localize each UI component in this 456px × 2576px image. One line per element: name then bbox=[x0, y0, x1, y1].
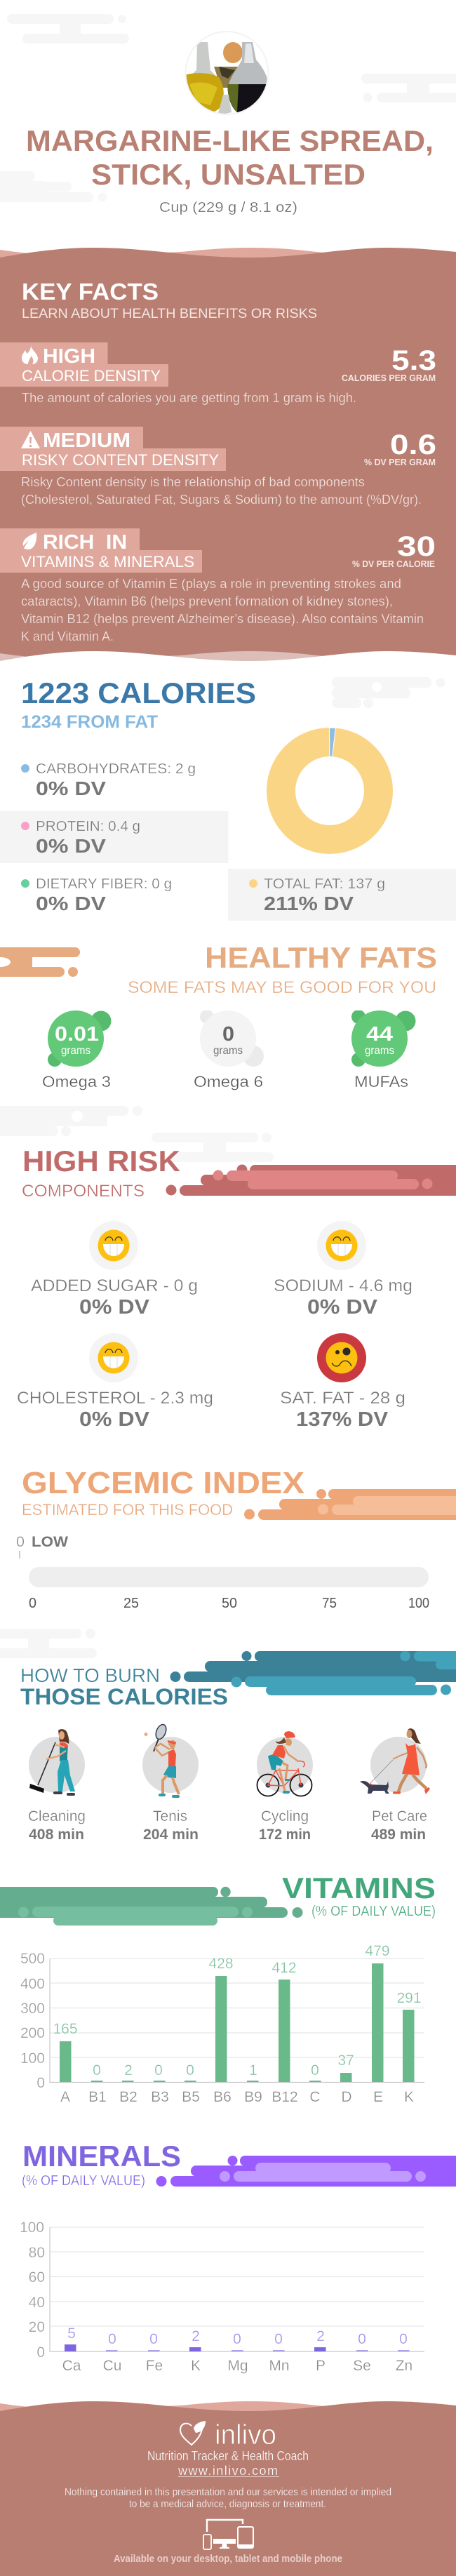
bar chart: vitamins: A bbox=[60, 2089, 70, 2105]
bar chart: vitamins: B5 bbox=[182, 2089, 200, 2105]
bar chart: minerals: 2 bbox=[316, 2328, 325, 2344]
bar chart: minerals: 0 bbox=[274, 2331, 283, 2347]
disclaimer bbox=[65, 2486, 391, 2510]
healthy fats heading: HEALTHY FATS bbox=[205, 941, 437, 974]
fact: risky content density: 0.6 bbox=[390, 429, 436, 460]
panel: how to burn those calories bbox=[20, 1651, 456, 1843]
bar chart: vitamins: 400 bbox=[20, 1976, 45, 1992]
icon: leaf bbox=[23, 533, 36, 549]
fact: rich in vitamins and minerals: A good source of Vitamin E (plays a role in preventing strokes and bbox=[21, 577, 401, 591]
macro: carbohydrates bbox=[21, 761, 196, 799]
banner: burn bbox=[170, 1651, 456, 1695]
fact: calorie density: HIGH bbox=[43, 345, 95, 368]
website link: www.inlivo.com bbox=[177, 2464, 278, 2478]
fact: calorie density: The amount of calories you are getting from 1 gram is high. bbox=[22, 391, 356, 405]
minerals subheading: (% OF DAILY VALUE) bbox=[22, 2173, 145, 2189]
banner: glycemic index bbox=[244, 1489, 456, 1520]
bar chart: vitamins: 37 bbox=[337, 2053, 354, 2069]
food image: oil bottles bbox=[185, 31, 269, 116]
vitamins subheading: (% OF DAILY VALUE) bbox=[311, 1904, 436, 1919]
bar chart: minerals: P bbox=[316, 2358, 326, 2374]
bar chart: vitamins: 0 bbox=[154, 2062, 163, 2078]
disclaimer: to be a medical advice, diagnosis or treatment. bbox=[129, 2498, 326, 2510]
macro: protein: 0% DV bbox=[36, 835, 106, 857]
bar chart: minerals: 2 bbox=[192, 2328, 200, 2344]
bar chart: vitamins: 0 bbox=[36, 2075, 45, 2091]
icon: devices bbox=[203, 2520, 253, 2549]
icon: cyclist bbox=[257, 1731, 311, 1796]
high risk heading: HIGH RISK bbox=[22, 1144, 180, 1177]
fact: rich in vitamins and minerals: RICH IN bbox=[43, 531, 127, 554]
fat: omega 6 bbox=[194, 1010, 264, 1090]
glycemic index subheading: ESTIMATED FOR THIS FOOD bbox=[22, 1501, 233, 1519]
healthy fats subheading: SOME FATS MAY BE GOOD FOR YOU bbox=[128, 978, 436, 997]
panel: high risk components bbox=[17, 1144, 456, 1431]
bar chart: minerals: 80 bbox=[29, 2245, 45, 2261]
fat: omega 6: Omega 6 bbox=[194, 1073, 263, 1090]
macro: total fat: TOTAL FAT: 137 g bbox=[264, 876, 385, 892]
icon: smiling face bbox=[317, 1221, 366, 1270]
fact: calorie density: 5.3 bbox=[391, 345, 436, 376]
bar chart: minerals: Mn bbox=[269, 2358, 290, 2374]
fact: risky content density: % DV PER GRAM bbox=[364, 457, 436, 467]
key facts heading: KEY FACTS bbox=[22, 279, 159, 305]
wave top edge bbox=[0, 248, 456, 267]
bar chart: vitamins: 479 bbox=[365, 1943, 390, 1959]
fact: calorie density: CALORIE DENSITY bbox=[22, 367, 161, 385]
risk: saturated fat: 137% DV bbox=[296, 1408, 389, 1431]
risk: added sugar bbox=[31, 1221, 198, 1319]
glycemic scale bar bbox=[29, 1567, 429, 1587]
bar chart: vitamins: 200 bbox=[20, 2025, 45, 2041]
bar chart: minerals: 0 bbox=[358, 2331, 366, 2347]
macro: dietary fiber: DIETARY FIBER: 0 g bbox=[36, 876, 172, 892]
bar chart: vitamins: 2 bbox=[124, 2062, 133, 2078]
fact: risky content density: MEDIUM bbox=[43, 429, 130, 452]
bar chart: vitamins: B1 bbox=[88, 2089, 107, 2105]
fact: rich in vitamins and minerals: 30 bbox=[397, 531, 436, 562]
panel: key facts bbox=[0, 248, 456, 674]
panel: footer bbox=[0, 2401, 456, 2576]
bar chart: minerals: 0 bbox=[399, 2331, 408, 2347]
title: STICK, UNSALTED bbox=[91, 158, 366, 191]
banner: healthy fats bbox=[0, 947, 80, 977]
risk: added sugar: ADDED SUGAR - 0 g bbox=[31, 1276, 198, 1295]
fat: MUFAs: grams bbox=[365, 1045, 394, 1057]
vitamins heading: VITAMINS bbox=[282, 1871, 436, 1904]
minerals heading: MINERALS bbox=[22, 2140, 181, 2173]
fact: risky content density: Risky Content density is the relationship of bad components bbox=[21, 475, 365, 489]
activity: cycling bbox=[257, 1731, 313, 1843]
bar chart: minerals: 5 bbox=[67, 2325, 76, 2342]
fact: calorie density: CALORIES PER GRAM bbox=[342, 373, 436, 383]
banner: vitamins bbox=[0, 1887, 303, 1926]
fact: rich in vitamins and minerals: VITAMINS & MINERALS bbox=[21, 553, 194, 570]
title bbox=[26, 124, 434, 191]
bar chart: vitamins: B2 bbox=[119, 2089, 138, 2105]
risk: saturated fat bbox=[280, 1333, 405, 1431]
glycemic value marker: LOW bbox=[32, 1534, 68, 1550]
macro: carbohydrates: 0% DV bbox=[36, 778, 106, 799]
activity: cleaning bbox=[28, 1729, 86, 1843]
bar chart: vitamins: B9 bbox=[244, 2089, 262, 2105]
glycemic value marker bbox=[16, 1534, 68, 1559]
background cloud: high risk centre bbox=[152, 1133, 274, 1162]
background cloud: title left bbox=[0, 171, 107, 202]
burn heading line 1: HOW TO BURN bbox=[20, 1664, 160, 1686]
bar chart: minerals: 0 bbox=[108, 2331, 116, 2347]
availability note: Available on your desktop, tablet and mobile phone bbox=[114, 2553, 342, 2565]
activity: cycling: Cycling bbox=[261, 1808, 309, 1824]
risk: cholesterol bbox=[17, 1333, 213, 1431]
panel: minerals bbox=[20, 2140, 456, 2374]
macro: total fat bbox=[228, 869, 456, 921]
background cloud: calories bbox=[332, 677, 445, 708]
bar chart: minerals: Mg bbox=[227, 2358, 248, 2374]
bar chart: vitamins: D bbox=[341, 2089, 352, 2105]
activity: tennis: 204 min bbox=[143, 1827, 199, 1843]
disclaimer: Nothing contained in this presentation and our services is intended or implied bbox=[65, 2486, 391, 2498]
title: MARGARINE-LIKE SPREAD, bbox=[26, 124, 434, 157]
risk: sodium bbox=[274, 1221, 413, 1319]
fat: omega 3: 0.01 bbox=[55, 1023, 99, 1046]
icon: flame bbox=[22, 346, 38, 364]
calories heading: 1223 CALORIES bbox=[21, 676, 256, 709]
activity: cleaning: 408 min bbox=[29, 1827, 84, 1843]
banner: high risk bbox=[166, 1165, 456, 1196]
donut chart bbox=[281, 728, 379, 839]
glycemic scale labels: 100 bbox=[408, 1596, 429, 1611]
risk: cholesterol: CHOLESTEROL - 2.3 mg bbox=[17, 1389, 213, 1408]
glycemic scale labels: 0 bbox=[29, 1596, 36, 1611]
bar chart: minerals: Cu bbox=[103, 2358, 121, 2374]
tagline: Nutrition Tracker & Health Coach bbox=[147, 2449, 309, 2463]
icon: warning triangle bbox=[21, 431, 40, 448]
icon: sad face bbox=[317, 1333, 366, 1382]
icon: tennis player bbox=[145, 1723, 180, 1798]
panel: vitamins bbox=[0, 1871, 436, 2105]
logo: inlivo wordmark: inlivo bbox=[215, 2420, 276, 2450]
macro: carbohydrates: CARBOHYDRATES: 2 g bbox=[36, 761, 196, 777]
bar chart: vitamins: B3 bbox=[151, 2089, 169, 2105]
glycemic index heading: GLYCEMIC INDEX bbox=[22, 1466, 304, 1500]
risk: sodium: 0% DV bbox=[307, 1296, 378, 1319]
bar chart: minerals: 0 bbox=[36, 2344, 45, 2361]
activity: pet care: 489 min bbox=[371, 1827, 426, 1843]
activity: pet care bbox=[360, 1728, 430, 1843]
risk: sodium: SODIUM - 4.6 mg bbox=[274, 1276, 413, 1295]
panel: calories bbox=[0, 676, 456, 921]
activity: cycling: 172 min bbox=[259, 1827, 311, 1843]
fat: MUFAs bbox=[351, 1010, 415, 1090]
panel: glycemic index bbox=[16, 1466, 456, 1611]
bar chart: vitamins: 0 bbox=[186, 2062, 194, 2078]
fat: MUFAs: MUFAs bbox=[354, 1073, 408, 1090]
activity: tennis: Tenis bbox=[153, 1808, 187, 1824]
activity: cleaning: Cleaning bbox=[28, 1808, 86, 1824]
glycemic value marker: 0 bbox=[16, 1534, 25, 1550]
bar chart: minerals: 100 bbox=[20, 2220, 44, 2236]
icon: smiling face bbox=[89, 1221, 138, 1270]
glycemic scale labels bbox=[29, 1596, 429, 1611]
background cloud: high risk left bbox=[0, 1106, 142, 1136]
risk: saturated fat: SAT. FAT - 28 g bbox=[280, 1389, 405, 1408]
activity: pet care: Pet Care bbox=[372, 1808, 427, 1824]
risk: cholesterol: 0% DV bbox=[79, 1408, 150, 1431]
bar chart: vitamins: 1 bbox=[249, 2062, 257, 2078]
high risk subheading: COMPONENTS bbox=[22, 1182, 145, 1201]
calories from fat: 1234 FROM FAT bbox=[21, 712, 158, 732]
bar chart: vitamins bbox=[20, 1943, 424, 2105]
fact: risky content density: RISKY CONTENT DENSITY bbox=[22, 451, 219, 469]
bar chart: minerals: K bbox=[191, 2358, 201, 2374]
bar chart: minerals: 0 bbox=[233, 2331, 241, 2347]
bar chart: vitamins: 291 bbox=[396, 1990, 422, 2006]
fat: omega 6: grams bbox=[213, 1045, 243, 1057]
fact: rich in vitamins and minerals bbox=[0, 528, 436, 643]
bar chart: minerals: 60 bbox=[29, 2269, 45, 2285]
bar chart: vitamins: B12 bbox=[271, 2089, 298, 2105]
icon: smiling face bbox=[89, 1333, 138, 1382]
macro: protein bbox=[0, 811, 229, 863]
fat: omega 6: 0 bbox=[222, 1023, 234, 1046]
bar chart: vitamins: 428 bbox=[208, 1956, 234, 1972]
bar chart: vitamins: B6 bbox=[213, 2089, 232, 2105]
bar chart: vitamins: 412 bbox=[271, 1960, 297, 1976]
background cloud: top right bbox=[361, 74, 456, 102]
bar chart: minerals: 0 bbox=[149, 2331, 158, 2347]
icon: woman walking dog bbox=[360, 1728, 430, 1794]
bar chart: vitamins: C bbox=[309, 2089, 321, 2105]
fat: MUFAs: 44 bbox=[366, 1023, 393, 1046]
fact: risky content density: (Cholesterol, Saturated Fat, Sugars & Sodium) to the amount (%DV/gr). bbox=[21, 493, 422, 507]
fact: rich in vitamins and minerals: K and Vitamin A. bbox=[21, 629, 114, 643]
panel: healthy fats bbox=[0, 941, 437, 1090]
fact: rich in vitamins and minerals: % DV PER CALORIE bbox=[352, 559, 435, 569]
icon: person sweeping bbox=[29, 1729, 75, 1796]
bar chart: vitamins: 500 bbox=[20, 1951, 45, 1967]
bar chart: minerals: 20 bbox=[29, 2319, 45, 2335]
bar chart: minerals: Zn bbox=[396, 2358, 413, 2374]
fat: omega 3: grams bbox=[61, 1045, 90, 1057]
macro: total fat: 211% DV bbox=[264, 893, 354, 914]
glycemic scale labels: 50 bbox=[222, 1596, 237, 1611]
bar chart: minerals: Se bbox=[353, 2358, 371, 2374]
bar chart: vitamins: E bbox=[373, 2089, 383, 2105]
macro: dietary fiber: 0% DV bbox=[36, 893, 106, 914]
bar chart: vitamins: 100 bbox=[20, 2050, 45, 2067]
glycemic scale labels: 75 bbox=[322, 1596, 337, 1611]
background cloud: burn bbox=[0, 1629, 97, 1658]
activity: tennis bbox=[142, 1723, 199, 1843]
risk: added sugar: 0% DV bbox=[79, 1296, 150, 1319]
fact: risky content density bbox=[0, 427, 436, 507]
macro: dietary fiber bbox=[21, 876, 172, 914]
bar chart: vitamins: K bbox=[404, 2089, 414, 2105]
background cloud: top left bbox=[7, 14, 129, 44]
bar chart: minerals: Fe bbox=[146, 2358, 163, 2374]
fact: rich in vitamins and minerals: cataracts), Vitamin B6 (helps prevent formation of kidney stones), bbox=[21, 594, 393, 608]
banner: minerals bbox=[156, 2156, 456, 2187]
fat: omega 3 bbox=[42, 1010, 111, 1090]
glycemic scale labels: 25 bbox=[123, 1596, 139, 1611]
bar chart: vitamins: 300 bbox=[20, 2001, 45, 2017]
bar chart: minerals: 40 bbox=[29, 2295, 45, 2311]
macro: protein: PROTEIN: 0.4 g bbox=[36, 819, 140, 834]
serving size: Cup (229 g / 8.1 oz) bbox=[159, 200, 297, 215]
bar chart: vitamins: 0 bbox=[311, 2062, 319, 2078]
burn heading line 2: THOSE CALORIES bbox=[20, 1684, 228, 1709]
bar chart: minerals: Ca bbox=[62, 2358, 81, 2374]
bar chart: vitamins: 0 bbox=[93, 2062, 101, 2078]
fact: rich in vitamins and minerals: Vitamin B12 (helps prevent Alzheimer’s disease). Also contains Vitamin bbox=[21, 612, 424, 626]
fact: calorie density bbox=[0, 342, 436, 405]
fat: omega 3: Omega 3 bbox=[42, 1073, 111, 1090]
bar chart: vitamins: 165 bbox=[53, 2021, 78, 2037]
logo: inlivo heart bbox=[180, 2421, 206, 2445]
bar chart: minerals bbox=[20, 2220, 424, 2374]
key facts subheading: LEARN ABOUT HEALTH BENEFITS OR RISKS bbox=[22, 307, 317, 321]
